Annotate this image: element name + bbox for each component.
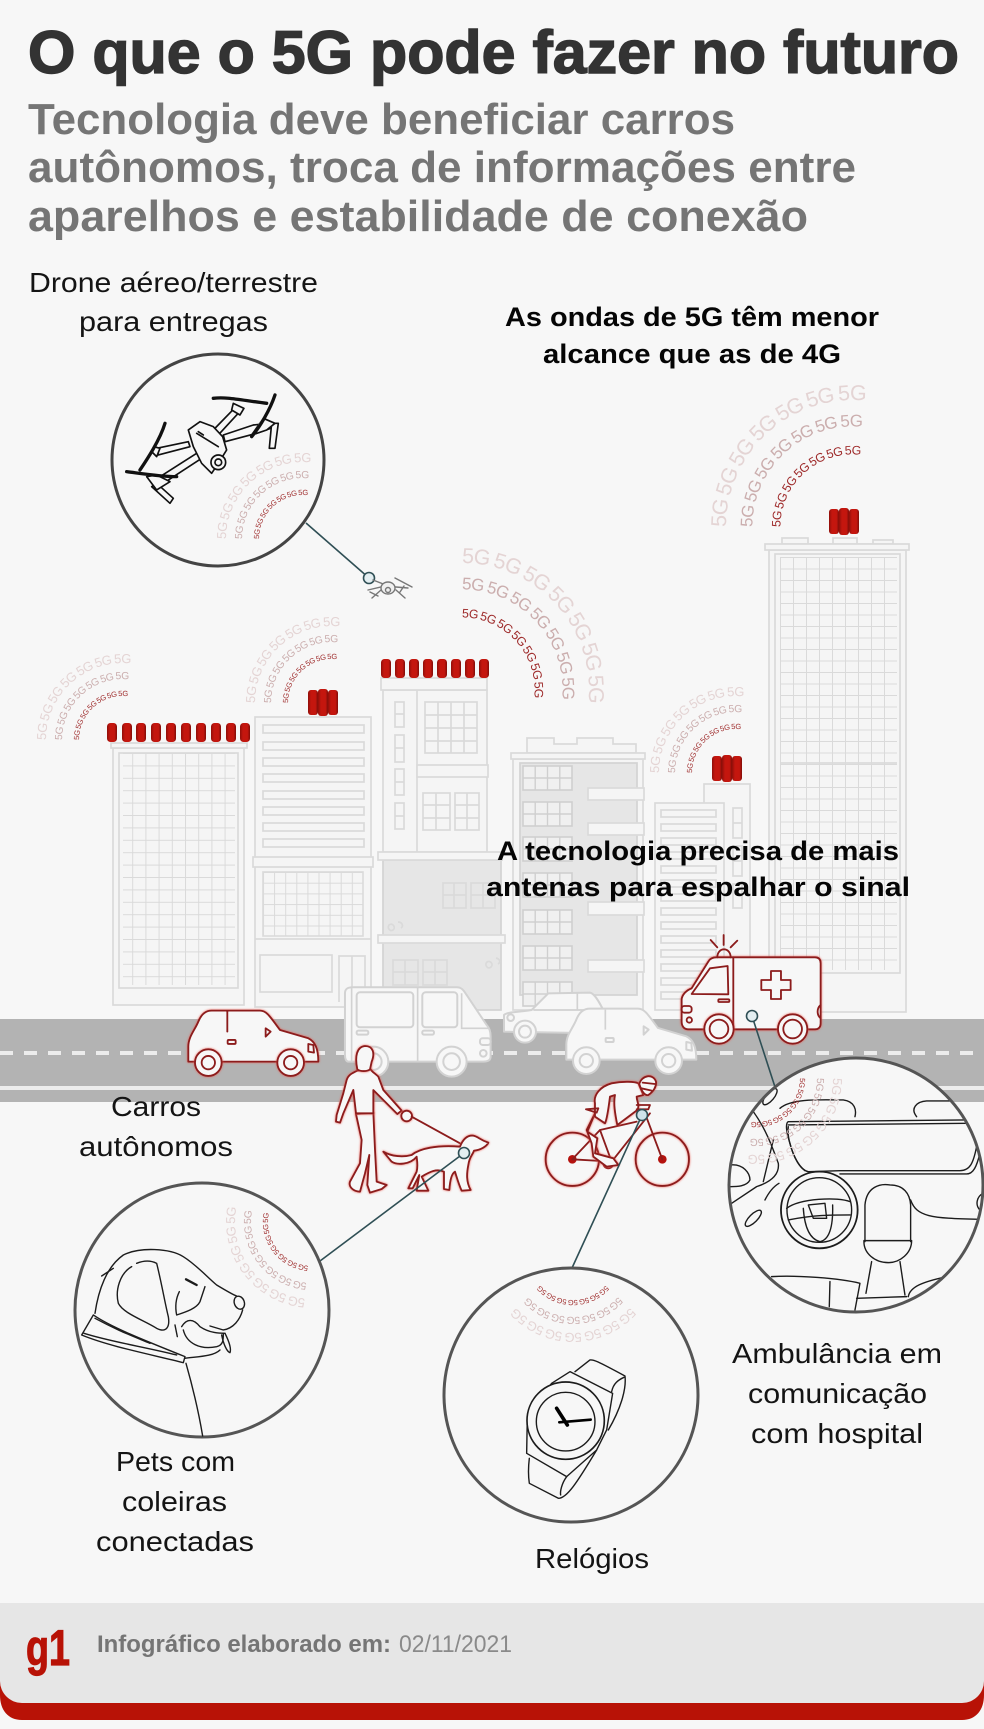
- label: pets: [96, 1446, 254, 1557]
- person walking the dog: [336, 1046, 488, 1193]
- 5G waves: watch: 5G 5G 5G 5G 5G 5G 5G: [537, 1286, 609, 1306]
- label: autonomous cars: [79, 1091, 233, 1162]
- building 2 with louvres: [253, 717, 373, 1007]
- 5G waves: building 1: 5G 5G 5G 5G 5G 5G 5G: [37, 654, 130, 740]
- callout: more antennas: A tecnologia precisa de mais: [497, 836, 899, 866]
- 5G waves: building 5: 5G 5G 5G 5G 5G 5G 5G: [650, 687, 744, 772]
- circle: ambulance interior detail: [728, 1056, 984, 1314]
- 5G waves: building 1: 5G 5G 5G 5G 5G 5G 5G: [74, 690, 128, 740]
- footer credit: Infográfico elaborado em:: [97, 1631, 391, 1658]
- building 4 with shelves: [511, 738, 645, 1010]
- antenna cluster on building 6: [829, 508, 859, 535]
- 5G waves: building 1: 5G 5G 5G 5G 5G 5G 5G: [55, 672, 128, 740]
- 5G waves: watch: 5G 5G 5G 5G 5G 5G 5G: [524, 1298, 623, 1324]
- 5G waves: ambulance: 5G 5G 5G 5G 5G 5G 5G: [750, 1078, 824, 1146]
- 5G waves: building 2: 5G 5G 5G 5G 5G 5G 5G: [282, 654, 337, 703]
- 5G waves: building 5: 5G 5G 5G 5G 5G 5G 5G: [668, 704, 742, 772]
- cyclist: [546, 1076, 689, 1186]
- icon: dog head: [82, 1250, 246, 1436]
- 5G waves: drone: 5G 5G 5G 5G 5G 5G 5G: [235, 470, 308, 538]
- 5G waves: ambulance: 5G 5G 5G 5G 5G 5G 5G: [748, 1078, 842, 1164]
- label: watches: Relógios: [535, 1543, 649, 1574]
- subtitle: aparelhos e estabilidade de conexão: [28, 192, 808, 241]
- 5G waves: building 3: 5G 5G 5G 5G 5G 5G 5G: [463, 548, 604, 702]
- 5G waves: ambulance: 5G 5G 5G 5G 5G 5G 5G: [751, 1078, 806, 1128]
- building 1 with grid facade: [111, 743, 247, 1005]
- 5G waves: building 3: 5G 5G 5G 5G 5G 5G 5G: [462, 608, 544, 698]
- 5G waves: watch: [511, 1286, 636, 1342]
- antennas row on building 1: [107, 723, 250, 742]
- icon: drone: [127, 395, 278, 503]
- mini drone: [368, 578, 412, 598]
- icon: wristwatch: [527, 1360, 625, 1498]
- footer date: 02/11/2021: [399, 1631, 512, 1658]
- 5G waves: building 2: 5G 5G 5G 5G 5G 5G 5G: [246, 617, 340, 702]
- callout: 5G range: [505, 302, 880, 369]
- road: [0, 1019, 984, 1102]
- callout: more antennas: [486, 836, 910, 902]
- building 5 stepped: [655, 784, 750, 1010]
- label: autonomous cars: autônomos: [79, 1131, 233, 1162]
- label: ambulance: Ambulância em: [732, 1338, 942, 1369]
- label: drone: Drone aéreo/terrestre: [29, 267, 318, 298]
- logo: g1: g1: [26, 1620, 70, 1676]
- label: pets: coleiras: [122, 1486, 227, 1517]
- 5G waves: building 5: 5G 5G 5G 5G 5G 5G 5G: [686, 724, 741, 773]
- icon: dashboard interior: [730, 1086, 983, 1310]
- label: ambulance: comunicação: [748, 1378, 927, 1409]
- label: ambulance: [732, 1338, 942, 1449]
- subtitle: autônomos, troca de informações entre: [28, 143, 856, 192]
- 5G waves: building 2: 5G 5G 5G 5G 5G 5G 5G: [264, 634, 338, 702]
- footer bar: [0, 1603, 984, 1720]
- 5G waves: building 6: 5G 5G 5G 5G 5G 5G 5G: [711, 385, 865, 526]
- antenna cluster on building 5: [712, 755, 742, 782]
- subtitle: Tecnologia deve beneficiar carros: [28, 95, 735, 144]
- subtitle: [28, 95, 856, 241]
- circle: drone detail: [110, 352, 326, 568]
- label: pets: Pets com: [116, 1446, 235, 1477]
- building 6 skyscraper: [765, 538, 909, 1012]
- antenna cluster on building 2: [308, 689, 338, 716]
- 5G waves: dog: 5G 5G 5G 5G 5G 5G 5G: [262, 1213, 308, 1271]
- 5G waves: building 6: 5G 5G 5G 5G 5G 5G 5G: [772, 446, 860, 526]
- 5G waves: watch: 5G 5G 5G 5G 5G 5G 5G: [511, 1308, 636, 1342]
- red autonomous car: [188, 1011, 318, 1076]
- label: ambulance: com hospital: [751, 1418, 923, 1449]
- 5G waves: drone: 5G 5G 5G 5G 5G 5G 5G: [217, 453, 310, 538]
- label: autonomous cars: Carros: [111, 1091, 201, 1122]
- building 3 tall mixed facade: [378, 678, 505, 1010]
- circle: dog detail: [74, 1182, 330, 1438]
- callout: 5G range: As ondas de 5G têm menor: [505, 302, 880, 332]
- antennas row on building 3: [381, 659, 489, 678]
- callout: more antennas: antenas para espalhar o sinal: [486, 872, 910, 902]
- callout: 5G range: alcance que as de 4G: [543, 339, 841, 369]
- red ambulance: [682, 935, 821, 1044]
- label: drone: para entregas: [79, 306, 268, 337]
- label: drone: [29, 267, 318, 337]
- circle: watch detail: [442, 1266, 700, 1524]
- 5G waves: dog: 5G 5G 5G 5G 5G 5G 5G: [244, 1211, 306, 1290]
- white van: [345, 987, 491, 1077]
- connector lines and markers: [306, 523, 775, 1268]
- white car front: [566, 1009, 696, 1074]
- 5G waves: dog: 5G 5G 5G 5G 5G 5G 5G: [226, 1208, 304, 1308]
- 5G waves: building 3: 5G 5G 5G 5G 5G 5G 5G: [462, 578, 574, 699]
- label: pets: conectadas: [96, 1526, 254, 1557]
- 5G waves: drone: 5G 5G 5G 5G 5G 5G 5G: [254, 490, 308, 539]
- grey car behind: [504, 993, 604, 1043]
- 5G waves: building 6: 5G 5G 5G 5G 5G 5G 5G: [740, 414, 862, 526]
- title: O que o 5G pode fazer no futuro: [28, 19, 959, 86]
